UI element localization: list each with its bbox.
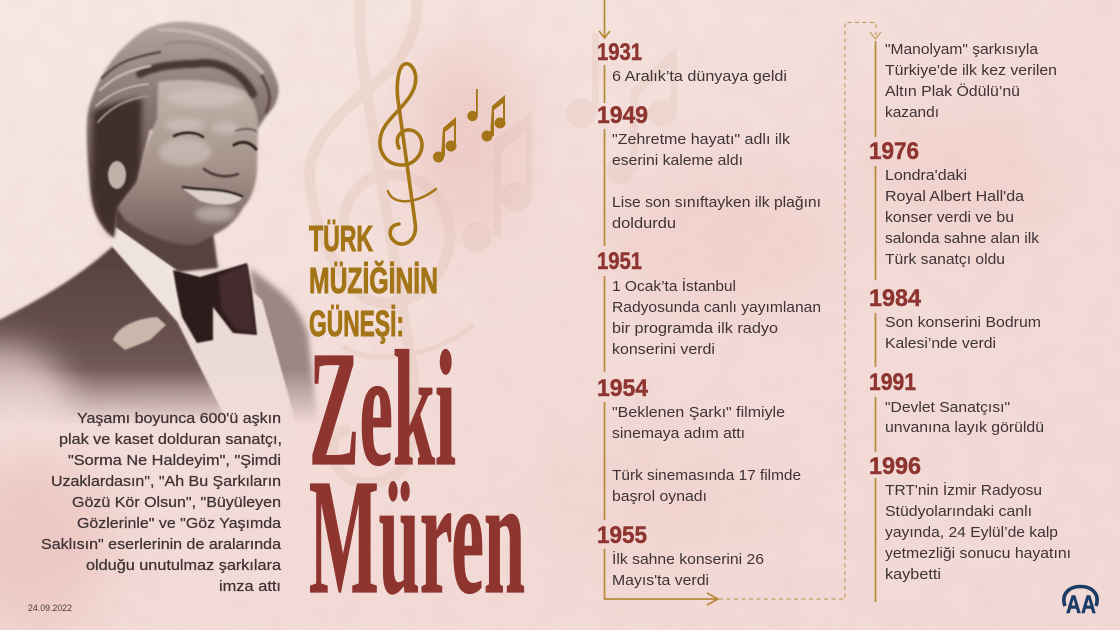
left description paragraph	[41, 411, 282, 595]
suit lower left fade	[0, 345, 70, 455]
timeline column 2 years: 1996	[869, 453, 921, 480]
timeline column 1 events: İlk sahne konserini 26	[612, 550, 764, 568]
timeline column 2 events: Altın Plak Ödülü’nü	[885, 82, 1020, 100]
smile	[182, 187, 243, 205]
icon: music notes	[433, 89, 506, 162]
timeline column 2 events: TRT'nin İzmir Radyosu	[885, 481, 1042, 499]
icon: AA logo: AA	[1066, 591, 1096, 619]
timeline column 1 events: 6 Aralık’ta dünyaya geldi	[612, 69, 787, 85]
neck shadow	[115, 205, 218, 272]
timeline column 2 events: Stüdyolarındaki canlı	[885, 504, 1032, 520]
suit jacket	[0, 246, 232, 430]
watermark: music note right	[566, 33, 677, 184]
left description paragraph: Gözlerinle" ve "Göz Yaşımda	[77, 516, 282, 532]
timeline column 1 events: "Zehretme hayatı" adlı ilk	[612, 132, 791, 148]
suit right shoulder	[250, 268, 318, 430]
timeline column 1 events: bir programda ilk radyo	[612, 321, 778, 337]
title: Türk Müziğinin Güneşi: MÜZİĞİNİN	[309, 260, 438, 301]
left description paragraph: Saklısın" eserlerinin de aralarında	[41, 537, 282, 553]
eyes and nose	[174, 129, 256, 176]
timeline column 2 events: Royal Albert Hall'da	[885, 189, 1025, 205]
shirt front	[177, 268, 294, 420]
title: Zeki Müren	[309, 317, 525, 628]
left description paragraph: olduğu unutulmaz şarkılara	[86, 558, 282, 574]
timeline column 1 events: "Beklenen Şarkı" filmiyle	[612, 405, 785, 421]
timeline column 1 events: Radyosunda canlı yayımlanan	[612, 300, 821, 316]
fringe shadow band	[140, 63, 253, 94]
timeline column 2 events: yayında, 24 Eylül’de kalp	[885, 525, 1058, 541]
hair mass	[87, 22, 279, 238]
timeline column 2 years: 1984	[869, 285, 922, 312]
timeline column 1 years: 1931	[597, 39, 642, 66]
timeline column 1 events: 1 Ocak’ta İstanbul	[612, 277, 736, 295]
dark hair at temple	[92, 98, 142, 236]
date: 24.09.2022	[28, 603, 72, 613]
timeline column 1 years: 1951	[597, 248, 642, 275]
timeline column 1 years	[597, 39, 649, 549]
timeline column 2 events: Türkiye'de ilk kez verilen	[885, 63, 1057, 79]
timeline column 1 events: eserini kaleme aldı	[612, 153, 743, 169]
hair strands	[96, 30, 269, 122]
timeline column 1 events: doldurdu	[612, 216, 676, 232]
timeline column 1 events: konserini verdi	[612, 342, 715, 358]
lapel flower	[113, 317, 166, 350]
timeline column 2 events: "Devlet Sanatçısı"	[885, 400, 1010, 416]
timeline column 2 events: konser verdi ve bu	[885, 210, 1014, 226]
timeline column 2 events: salonda sahne alan ilk	[885, 231, 1040, 247]
face	[117, 80, 258, 245]
left description paragraph: Uzaklardasın", "Ah Bu Şarkıların	[51, 474, 281, 490]
timeline column 2 events: unvanına layık görüldü	[885, 420, 1044, 436]
timeline column 2 events: "Manolyam" şarkısıyla	[885, 42, 1039, 58]
bow tie right lobe shade	[218, 265, 255, 332]
watermark: music note centre	[462, 112, 532, 252]
timeline column 2 events	[885, 42, 1071, 583]
ear	[108, 161, 126, 189]
left description paragraph: plak ve kaset dolduran sanatçı,	[59, 432, 282, 448]
timeline column 1 events: Mayıs'ta verdi	[612, 573, 709, 589]
timeline column 1 years: 1949	[597, 102, 648, 129]
title: Türk Müziğinin Güneşi: GÜNEŞİ:	[309, 303, 404, 344]
timeline column 1 events: sinemaya adım attı	[612, 426, 745, 442]
timeline column 1 events: başrol oynadı	[612, 489, 707, 505]
timeline column 2 events: Türk sanatçı oldu	[885, 252, 1005, 268]
title: Zeki Müren: Zeki	[309, 317, 456, 500]
title: Türk Müziğinin Güneşi	[309, 218, 438, 344]
timeline connector lines and arrows	[599, 0, 881, 605]
timeline column 2 events: yetmezliği sonucu hayatını	[885, 546, 1071, 562]
watermark: large treble clef	[310, 0, 473, 483]
timeline column 2 events: kazandı	[885, 105, 939, 121]
left description paragraph: Gözü Kör Olsun", "Büyüleyen	[72, 495, 281, 511]
shirt collar	[112, 226, 178, 322]
timeline column 1 events: Türk sinemasında 17 filmde	[612, 468, 801, 484]
left description paragraph: "Sorma Ne Haldeyim", "Şimdi	[68, 453, 281, 469]
title: Türk Müziğinin Güneşi: TÜRK	[309, 218, 373, 259]
left description paragraph: Yaşamı boyunca 600'ü aşkın	[77, 411, 281, 427]
portrait photo	[0, 22, 318, 455]
timeline column 1 events: Lise son sınıftayken ilk plağını	[612, 195, 821, 211]
timeline column 1 years: 1955	[597, 522, 647, 549]
timeline column 1 events	[612, 69, 821, 589]
left description paragraph: imza attı	[219, 579, 281, 595]
timeline column 2 years: 1976	[869, 138, 919, 165]
timeline column 2 events: Londra'daki	[885, 168, 967, 184]
cheek highlights	[159, 89, 243, 222]
timeline column 1 years: 1954	[597, 375, 649, 402]
timeline column 2 events: kaybetti	[885, 567, 941, 583]
infographic canvas: Müren	[309, 445, 525, 628]
icon: treble clef	[380, 64, 436, 244]
timeline column 2 years: 1991	[869, 369, 916, 396]
timeline column 2 events: Kalesi’nde verdi	[885, 336, 996, 352]
timeline column 2 years	[869, 138, 922, 480]
timeline column 2 events: Son konserini Bodrum	[885, 315, 1041, 331]
bow tie	[173, 263, 257, 343]
